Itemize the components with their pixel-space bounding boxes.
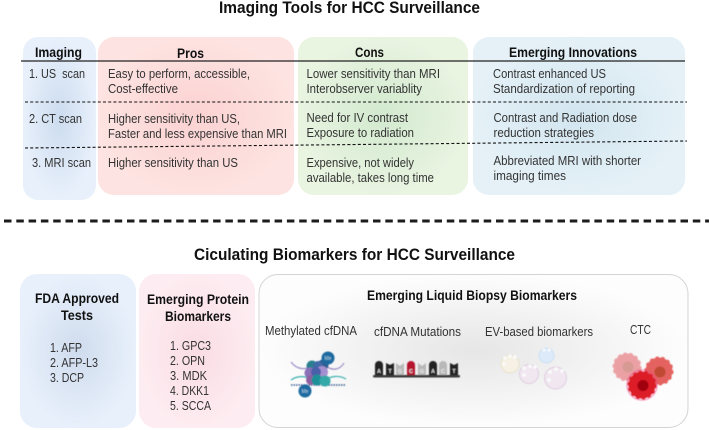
pros column text: Faster and less expensive than MRI — [108, 127, 287, 141]
panel: emerging protein biomarkers: 4. DKK1 — [170, 384, 209, 398]
emerging innovations column text: Contrast enhanced US — [493, 67, 606, 81]
panel: emerging liquid biopsy biomarkers — [259, 274, 688, 428]
emerging innovations column text — [493, 67, 641, 183]
emerging innovations column text: Standardization of reporting — [493, 82, 635, 96]
icon: DNA sequence with mutation: C — [441, 369, 445, 375]
imaging column text — [29, 67, 91, 170]
table header row — [35, 45, 637, 61]
panel: emerging protein biomarkers — [139, 274, 255, 428]
imaging column text: 1. US scan — [29, 67, 85, 81]
panel: emerging innovations column — [473, 37, 685, 195]
title: circulating biomarkers: Ciculating Biomarkers for HCC Surveillance — [194, 245, 515, 264]
panel: FDA approved tests: 2. AFP-L3 — [50, 356, 98, 370]
icon: nucleosome with methylation: Me — [302, 389, 309, 395]
icon: DNA sequence with mutation: T — [452, 369, 456, 375]
icon: DNA sequence with mutation: A — [377, 369, 381, 375]
icon: extracellular vesicles — [501, 348, 566, 389]
cons column text: Need for IV contrast — [306, 111, 408, 125]
label: cfDNA mutations: cfDNA Mutations — [374, 325, 461, 339]
table header row: Imaging — [35, 45, 82, 60]
panel: emerging protein biomarkers: Biomarkers — [165, 309, 231, 324]
panel: FDA approved tests: Tests — [61, 308, 93, 323]
panel heading: Emerging Liquid Biopsy Biomarkers — [367, 288, 577, 303]
pros column text: Higher sensitivity than US, — [108, 112, 240, 126]
panel: cons column — [298, 37, 468, 195]
panel: FDA approved tests: 3. DCP — [50, 371, 84, 385]
pros column text: Cost-effective — [108, 82, 178, 96]
icon: circulating tumor cells — [614, 354, 672, 400]
icon: DNA sequence with mutation: C — [409, 369, 413, 375]
panel: FDA approved tests: FDA Approved — [35, 291, 119, 306]
cons column text: Exposure to radiation — [306, 126, 414, 140]
icon: nucleosome with methylation: Me — [325, 356, 332, 362]
emerging innovations column text: reduction strategies — [494, 126, 594, 140]
table header row: Cons — [355, 45, 384, 60]
panel: FDA approved tests — [20, 274, 136, 428]
cons column text: available, takes long time — [306, 171, 434, 185]
panel: FDA approved tests: 1. AFP — [50, 341, 82, 355]
pros column text: Easy to perform, accessible, — [108, 67, 250, 81]
emerging innovations column text: imaging times — [494, 169, 566, 183]
table header row: Pros — [177, 46, 204, 61]
emerging innovations column text: Contrast and Radiation dose — [494, 111, 637, 125]
table header row: Emerging Innovations — [509, 45, 637, 60]
panel: emerging protein biomarkers: 1. GPC3 — [170, 339, 211, 353]
imaging column text: 2. CT scan — [29, 112, 82, 126]
cons column text: Expensive, not widely — [306, 156, 415, 170]
emerging innovations column text: Abbreviated MRI with shorter — [494, 154, 641, 168]
panel: pros column — [98, 37, 294, 195]
panel: emerging protein biomarkers: 2. OPN — [170, 354, 205, 368]
cons column text: Interobserver variablity — [306, 82, 423, 96]
pros column text — [108, 67, 287, 170]
cons column text — [306, 67, 440, 185]
panel: imaging column — [23, 37, 96, 200]
panel: emerging protein biomarkers: 5. SCCA — [170, 399, 212, 413]
label: CTC: CTC — [630, 323, 651, 337]
icon: DNA sequence with mutation: G — [420, 369, 424, 375]
icon: DNA sequence with mutation — [373, 361, 460, 378]
label: EV-based biomarkers: EV-based biomarkers — [485, 325, 593, 339]
icon: DNA sequence with mutation: G — [398, 369, 402, 375]
icon: DNA sequence with mutation: A — [431, 369, 435, 375]
icon: DNA sequence with mutation: T — [388, 369, 392, 375]
icon: nucleosome with methylation — [291, 352, 346, 398]
panel: emerging protein biomarkers: 3. MDK — [170, 369, 208, 383]
pros column text: Higher sensitivity than US — [108, 156, 238, 170]
imaging column text: 3. MRI scan — [32, 156, 91, 170]
label: methylated cfDNA: Methylated cfDNA — [265, 324, 358, 338]
cons column text: Lower sensitivity than MRI — [306, 67, 440, 81]
panel: emerging protein biomarkers: Emerging Protein — [147, 292, 249, 307]
